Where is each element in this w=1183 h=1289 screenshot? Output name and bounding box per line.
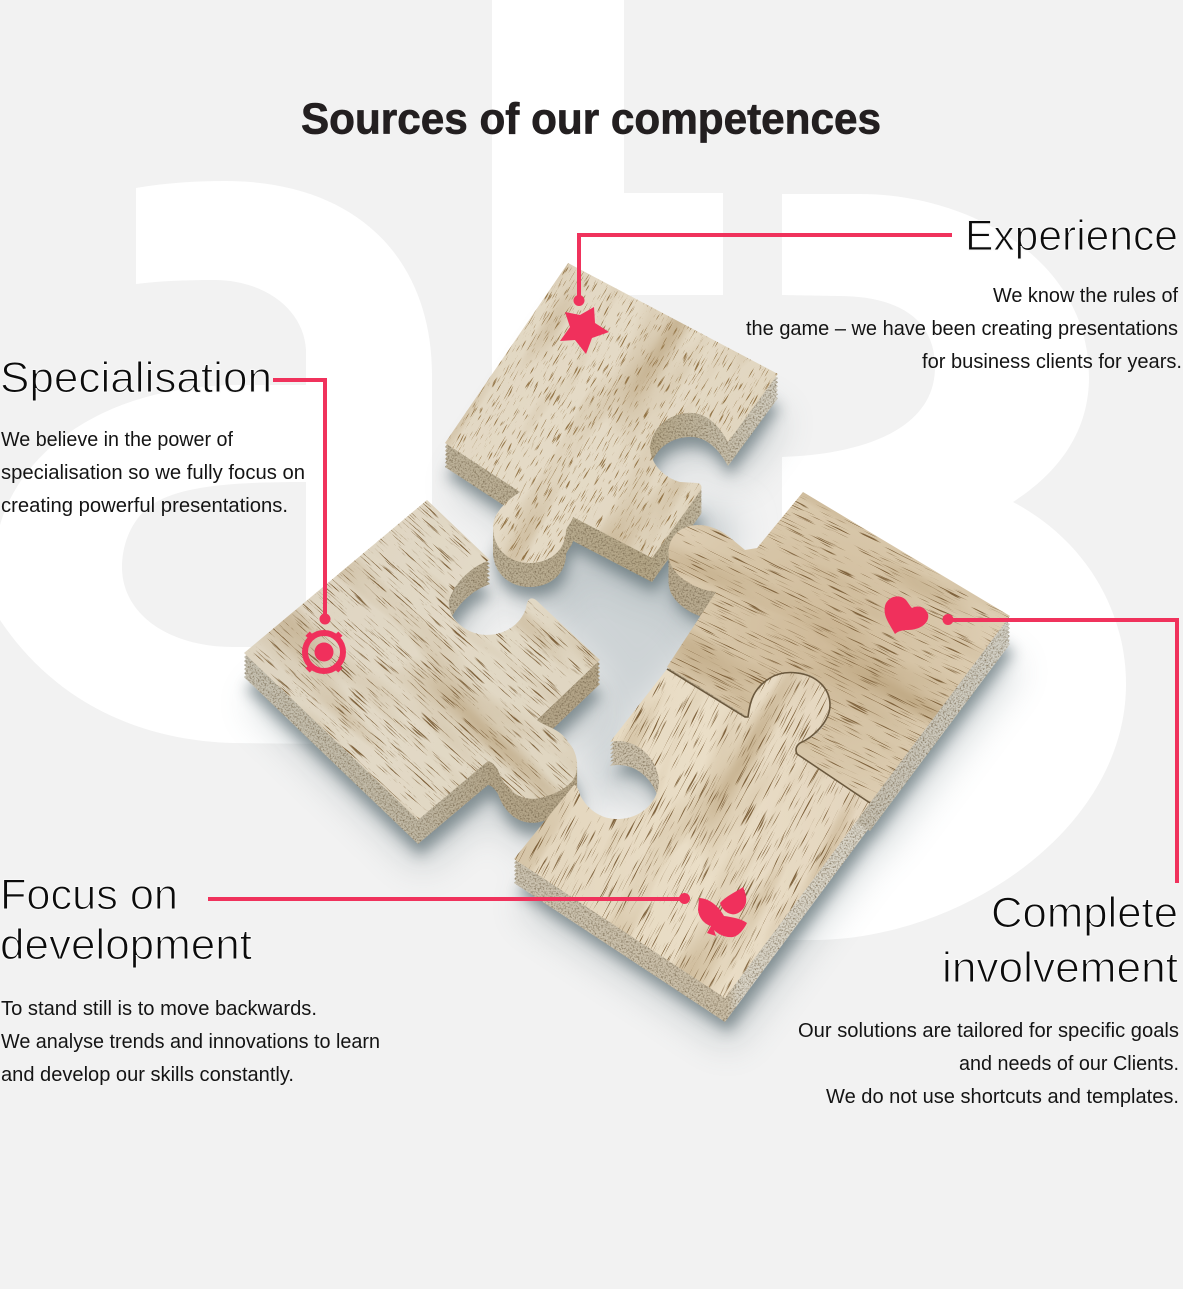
puzzle photograph (238, 263, 1024, 1052)
title: Sources of our competences (301, 94, 881, 144)
text: experience body (746, 285, 1182, 373)
text: specialisation body: creating powerful presentations. (1, 495, 288, 517)
text: focus on development body: To stand still is to move backwards. (1, 998, 317, 1020)
icon: leaf (698, 887, 747, 937)
piece: bottom (514, 520, 896, 998)
text: specialisation body: We believe in the power of (1, 429, 233, 451)
heading: focus on development (0, 871, 252, 969)
connector: experience (574, 235, 952, 306)
piece: top (445, 263, 778, 587)
heading: specialisation: Specialisation (0, 354, 272, 402)
text: focus on development body (1, 998, 380, 1086)
piece: left (244, 500, 600, 844)
text: complete involvement body: and needs of our Clients. (959, 1053, 1179, 1075)
icon: target (305, 631, 343, 673)
text: complete involvement body (798, 1020, 1179, 1108)
icon: star (560, 307, 609, 354)
heading: complete involvement: involvement (942, 944, 1178, 992)
text: focus on development body: We analyse trends and innovations to learn (1, 1031, 380, 1053)
text: specialisation body (1, 429, 305, 517)
text: experience body: the game – we have been creating presentations (746, 318, 1178, 340)
piece: right (667, 492, 1010, 831)
heading: focus on development: Focus on (0, 871, 178, 919)
text: complete involvement body: Our solutions are tailored for specific goals (798, 1020, 1179, 1042)
text: experience body: We know the rules of (993, 285, 1178, 307)
heading: experience: Experience (965, 212, 1178, 260)
text: specialisation body: specialisation so we fully focus on (1, 462, 305, 484)
connector: specialisation (273, 380, 330, 624)
connector: focus on development (208, 893, 690, 904)
block: experience (746, 212, 1182, 373)
heading: complete involvement (942, 889, 1178, 992)
connector: complete involvement (942, 614, 1177, 883)
piece: bottom side faces (514, 673, 870, 1022)
heading: focus on development: development (0, 921, 252, 969)
icon: heart (885, 596, 928, 634)
block: focus on development (0, 871, 380, 1086)
soft shadows under pieces (246, 297, 1020, 1048)
text: complete involvement body: We do not use shortcuts and templates. (826, 1086, 1179, 1108)
text: experience body: for business clients for years. (922, 351, 1182, 373)
block: specialisation (0, 354, 305, 517)
background letters (0, 0, 1126, 940)
block: complete involvement (798, 889, 1179, 1108)
heading: complete involvement: Complete (991, 889, 1178, 937)
text: focus on development body: and develop our skills constantly. (1, 1064, 294, 1086)
